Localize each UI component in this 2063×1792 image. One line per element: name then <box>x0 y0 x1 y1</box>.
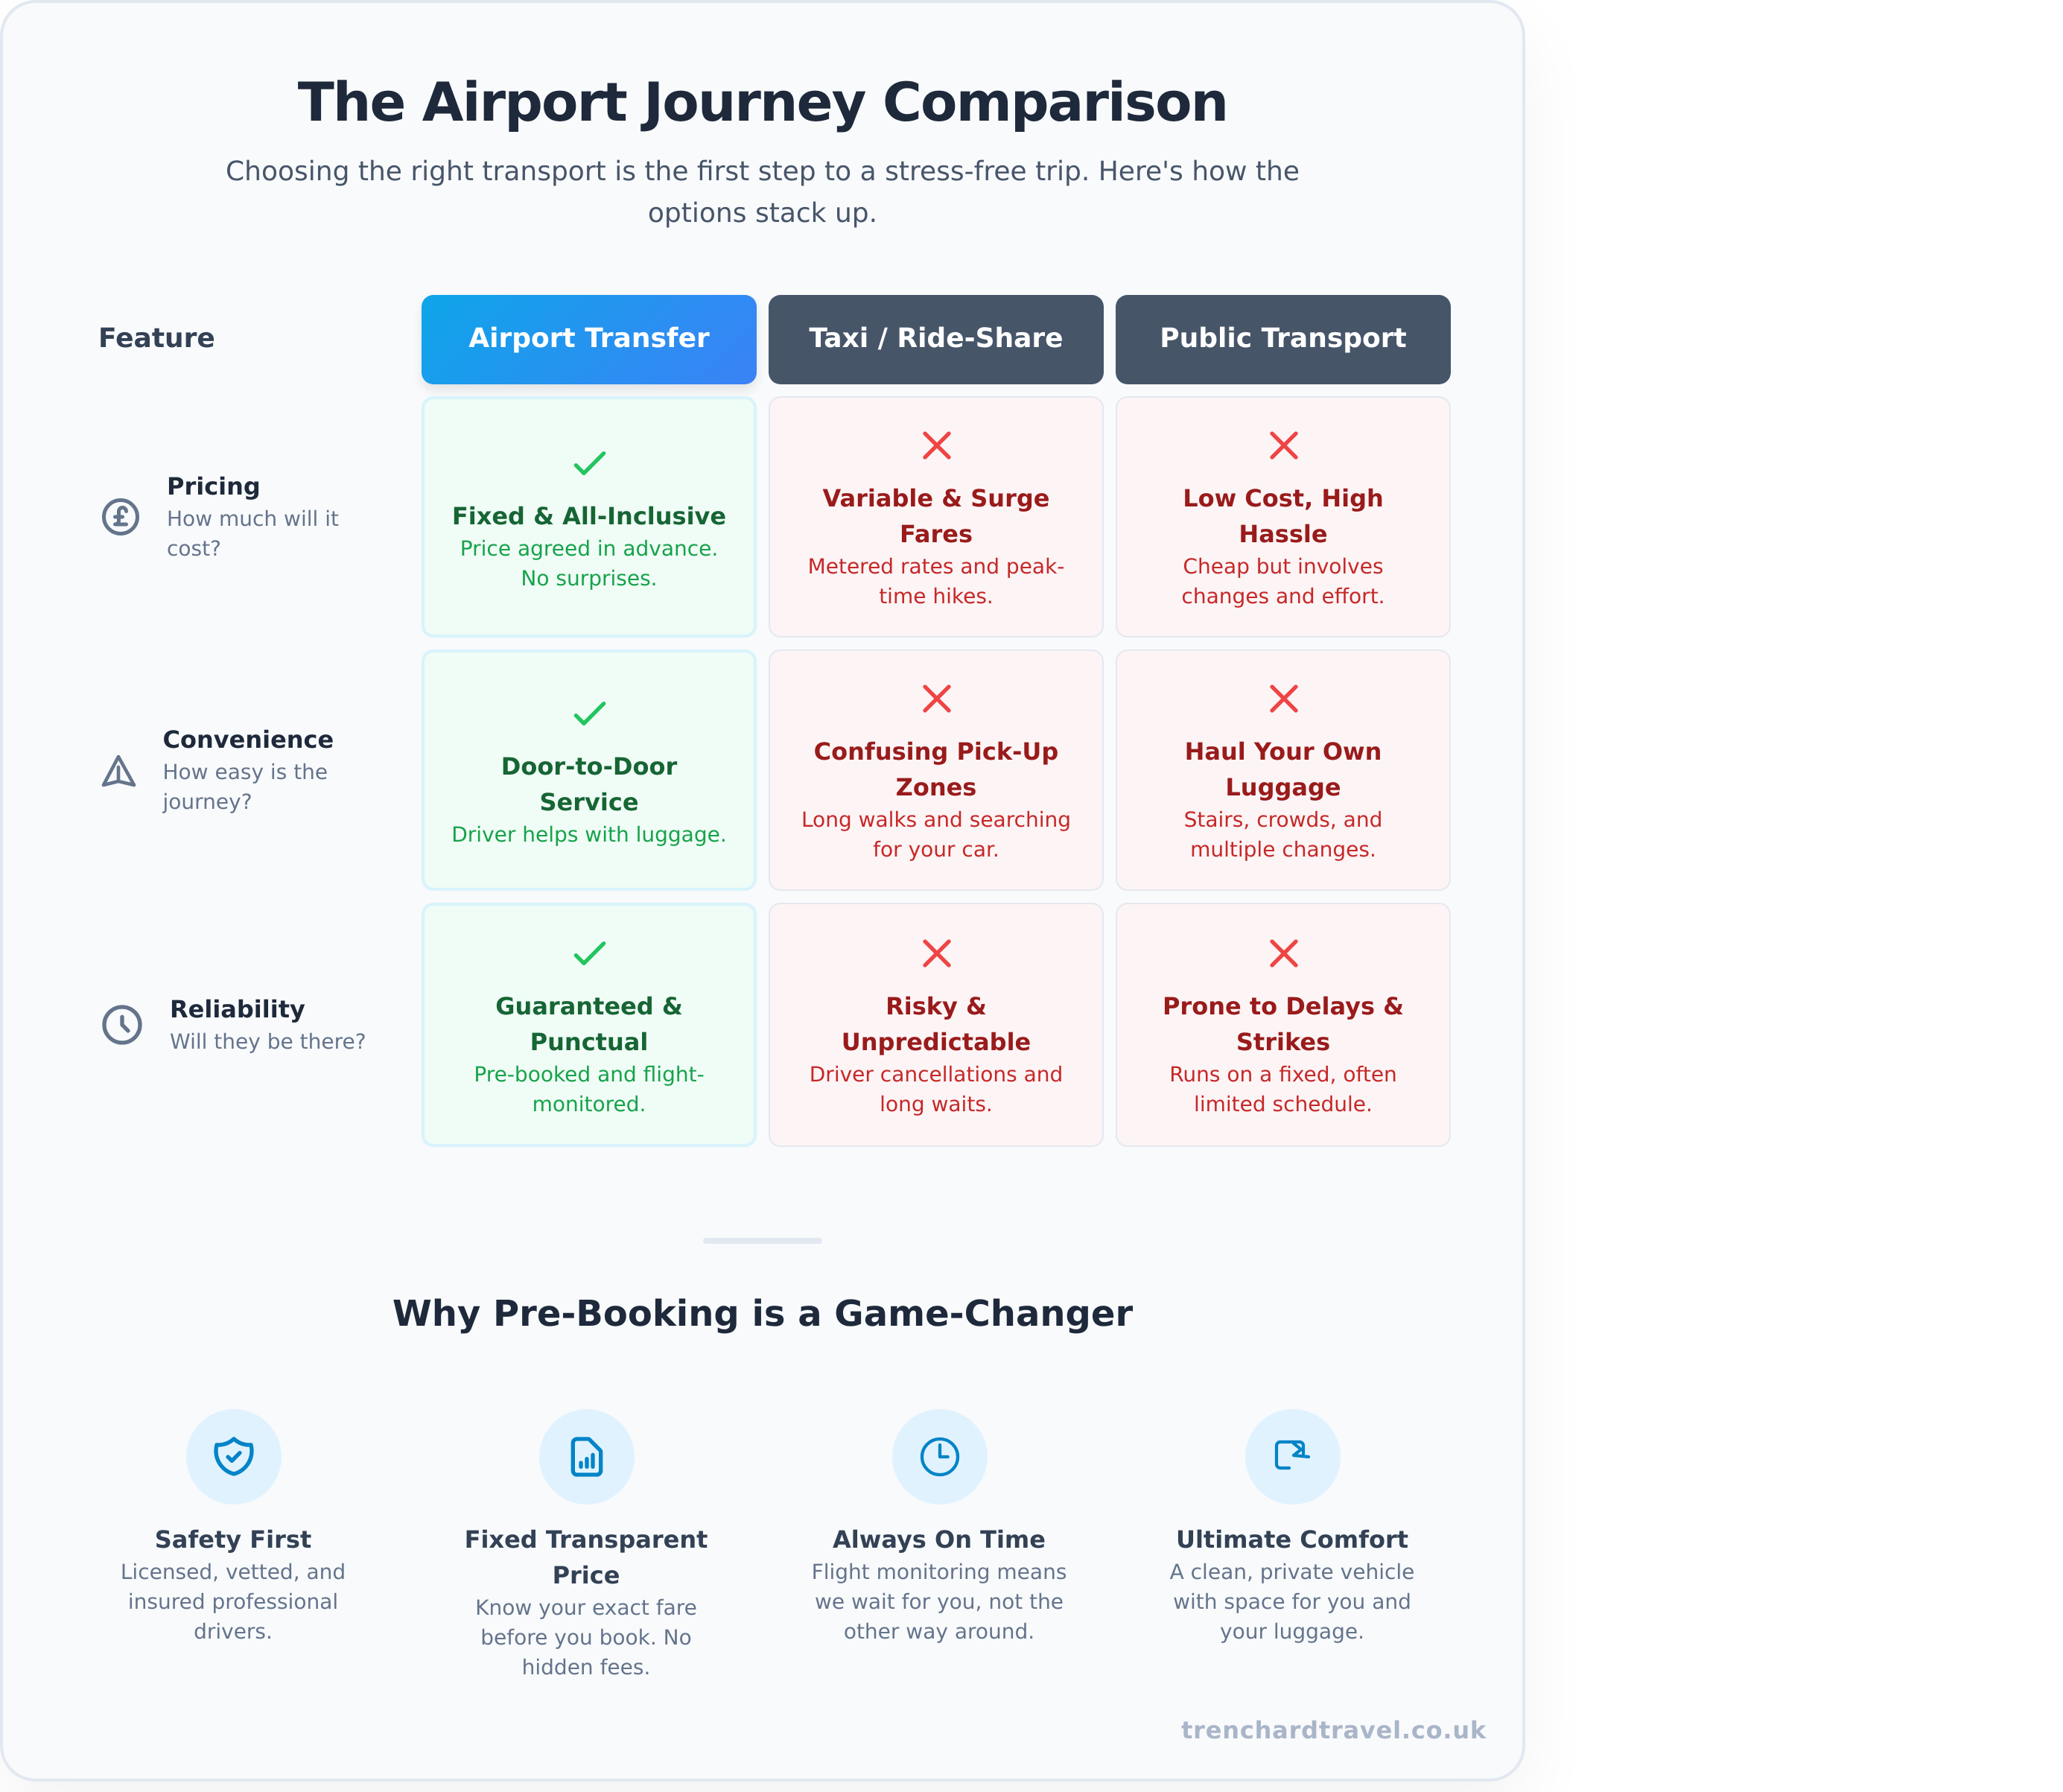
cell: airport convenience: Service <box>539 788 639 816</box>
benefit: always on time <box>812 1409 1067 1644</box>
cell: public pricing <box>1116 396 1451 638</box>
cell: public pricing: changes and effort. <box>1181 584 1385 609</box>
cell: airport reliability: Punctual <box>530 1028 648 1056</box>
text: convenience <box>162 725 334 814</box>
cell: taxi convenience: Long walks and searching <box>801 807 1071 832</box>
benefit text: drivers. <box>194 1619 273 1644</box>
cell: taxi pricing: time hikes. <box>879 584 994 609</box>
row label: convenience <box>101 725 334 814</box>
text: convenience: How easy is the <box>162 760 328 784</box>
cell: taxi convenience: Confusing Pick-Up <box>814 737 1058 766</box>
cell: taxi reliability: long waits. <box>880 1092 993 1116</box>
subtitle <box>226 156 1300 229</box>
icon: triangle <box>101 755 136 787</box>
cell: public convenience: multiple changes. <box>1190 837 1376 862</box>
cell: public reliability: Strikes <box>1236 1028 1330 1056</box>
cell: public pricing: Low Cost, High <box>1183 484 1384 512</box>
cell: taxi pricing: Variable & Surge <box>823 484 1049 512</box>
cell: public pricing: Hassle <box>1239 520 1328 548</box>
row label: pricing <box>102 472 339 561</box>
benefit title <box>465 1525 708 1589</box>
benefit text: before you book. No <box>480 1625 692 1650</box>
cell: airport reliability: monitored. <box>533 1092 646 1116</box>
icon: document chart <box>539 1409 635 1505</box>
text: pricing: How much will it <box>167 506 339 531</box>
cell: public convenience: Luggage <box>1225 773 1341 801</box>
cell: airport convenience: Door-to-Door <box>501 752 677 781</box>
benefit text: we wait for you, not the <box>815 1589 1064 1614</box>
benefit text <box>812 1560 1067 1644</box>
cell: airport pricing: No surprises. <box>521 566 658 591</box>
title: The Airport Journey Comparison <box>298 71 1227 133</box>
cell: public reliability: Runs on a fixed, often <box>1169 1062 1397 1087</box>
benefit title: Always On Time <box>833 1525 1046 1554</box>
text: pricing <box>167 472 339 561</box>
cell: airport pricing: Price agreed in advance. <box>460 536 718 561</box>
subtitle: options stack up. <box>648 198 877 229</box>
benefit text: Flight monitoring means <box>812 1560 1067 1584</box>
cell: taxi reliability: Driver cancellations and <box>810 1062 1063 1087</box>
cell: taxi reliability <box>769 903 1104 1147</box>
footer brand: trenchardtravel.co.uk <box>1181 1716 1487 1744</box>
benefit: safety first <box>121 1409 346 1644</box>
subtitle: Choosing the right transport is the first step to a stress-free trip. Here's how the <box>226 156 1300 187</box>
cell: public convenience <box>1116 649 1451 891</box>
column header: taxi: Taxi / Ride-Share <box>809 323 1064 354</box>
text: convenience: journey? <box>162 789 252 814</box>
cell: airport reliability <box>422 903 757 1147</box>
cell: taxi reliability: Risky & <box>886 992 987 1020</box>
benefit text <box>475 1595 697 1680</box>
icon: pound <box>102 498 139 536</box>
cell: taxi reliability: Unpredictable <box>842 1028 1031 1056</box>
row label: reliability <box>102 995 366 1054</box>
column header: public transport: Public Transport <box>1160 323 1407 354</box>
cell: public pricing: Cheap but involves <box>1183 554 1384 579</box>
column header: public transport <box>1116 295 1451 384</box>
cell: airport convenience <box>422 649 757 891</box>
cell: taxi convenience <box>769 649 1104 891</box>
heading: why pre-booking: Why Pre-Booking is a Game-Changer <box>392 1293 1133 1335</box>
benefit title: Safety First <box>155 1525 311 1554</box>
benefit text: other way around. <box>844 1619 1034 1644</box>
column header: airport transfer: Airport Transfer <box>468 323 710 354</box>
benefit title: Price <box>553 1561 620 1589</box>
text: reliability: Will they be there? <box>170 1029 366 1054</box>
cell: taxi convenience: for your car. <box>873 837 999 862</box>
benefit text <box>121 1560 346 1644</box>
text: convenience: Convenience <box>162 725 334 754</box>
cell: public convenience: Haul Your Own <box>1185 737 1382 766</box>
cell: public reliability: Prone to Delays & <box>1163 992 1404 1020</box>
text: reliability <box>170 995 366 1054</box>
column header: airport transfer <box>422 295 757 384</box>
column header: taxi <box>769 295 1104 384</box>
cell: public convenience: Stairs, crowds, and <box>1184 807 1382 832</box>
cell: public reliability: limited schedule. <box>1194 1092 1373 1116</box>
cell: airport reliability: Pre-booked and flight- <box>474 1062 705 1087</box>
benefit text: with space for you and <box>1173 1589 1411 1614</box>
benefit text: insured professional <box>128 1589 338 1614</box>
benefit text: Licensed, vetted, and <box>121 1560 346 1584</box>
benefit title: Ultimate Comfort <box>1176 1525 1408 1554</box>
cell: taxi pricing: Metered rates and peak- <box>808 554 1064 579</box>
benefit: fixed transparent price <box>465 1409 708 1680</box>
text: pricing: Pricing <box>167 472 261 501</box>
benefit text: A clean, private vehicle <box>1170 1560 1414 1584</box>
icon: clock <box>892 1409 988 1505</box>
cell: airport pricing <box>422 396 757 638</box>
cell: taxi convenience: Zones <box>896 773 976 801</box>
cell: airport pricing: Fixed & All-Inclusive <box>452 502 726 530</box>
icon: comfort <box>1245 1409 1341 1505</box>
cell: taxi pricing <box>769 396 1104 638</box>
cell: airport reliability: Guaranteed & <box>495 992 683 1020</box>
icon: clock <box>102 1005 142 1045</box>
benefit text: your luggage. <box>1220 1619 1364 1644</box>
text: reliability: Reliability <box>170 995 305 1023</box>
benefit title: Fixed Transparent <box>465 1525 708 1554</box>
text: pricing: cost? <box>167 536 221 561</box>
cell: taxi pricing: Fares <box>900 520 973 548</box>
cell: airport convenience: Driver helps with luggage. <box>451 822 727 847</box>
cell: public reliability <box>1116 903 1451 1147</box>
icon: shield check <box>186 1409 282 1505</box>
heading: feature column: Feature <box>98 323 215 354</box>
benefit text: hidden fees. <box>522 1655 650 1680</box>
panel: main card <box>0 0 1525 1782</box>
benefit text <box>1169 1560 1414 1644</box>
benefit text: Know your exact fare <box>475 1595 697 1620</box>
benefit: ultimate comfort <box>1169 1409 1414 1644</box>
